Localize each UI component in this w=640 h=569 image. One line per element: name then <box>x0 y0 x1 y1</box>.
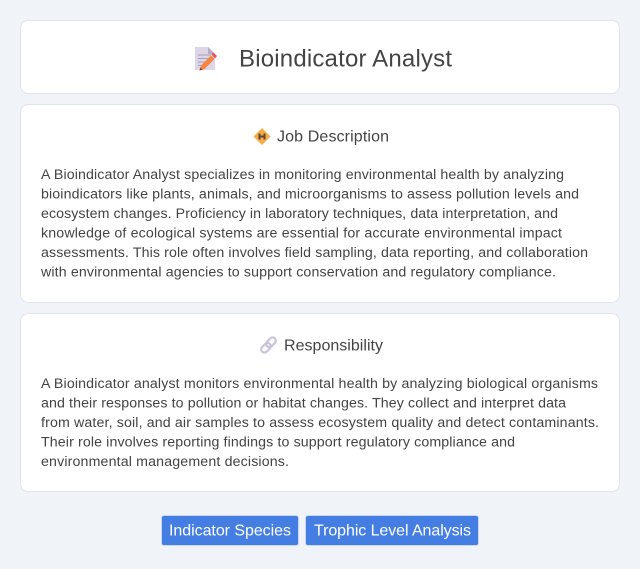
responsibility text: and their responses to pollution or habitat changes. They collect and interpret data <box>41 396 566 412</box>
tag: indicator species <box>162 516 298 546</box>
panel: responsibility <box>20 314 620 492</box>
tag: trophic level analysis <box>306 516 478 546</box>
panel: job description <box>20 104 620 302</box>
job description text <box>40 167 588 280</box>
job description text: assessments. This role often involves field sampling, data reporting, and collaboration <box>41 245 588 261</box>
responsibility text <box>41 376 599 470</box>
responsibility text: from water, soil, and air samples to assess ecosystem quality and detect contaminants. <box>41 415 599 431</box>
icon: chain link <box>260 336 277 354</box>
tag: trophic level analysis: Trophic Level Analysis <box>314 522 471 540</box>
heading: job description: Job Description <box>277 128 389 146</box>
job description text: bioindicators like plants, animals, and microorganisms to assess pollution levels and <box>41 186 579 202</box>
job description text: knowledge of ecological systems are essential for accurate environmental impact <box>41 226 562 242</box>
title panel <box>20 20 620 94</box>
job description text: with environmental agencies to support conservation and regulatory compliance. <box>40 264 556 280</box>
responsibility text: Their role involves reporting findings to support regulatory compliance and <box>41 434 515 450</box>
tag: indicator species: Indicator Species <box>169 522 291 540</box>
responsibility text: environmental management decisions. <box>41 454 289 470</box>
job description text: ecosystem changes. Proficiency in laboratory techniques, data interpretation, and <box>41 206 558 222</box>
icon: diamond sign <box>254 128 270 145</box>
title: Bioindicator Analyst <box>239 46 452 72</box>
heading: responsibility: Responsibility <box>284 338 383 354</box>
responsibility text: A Bioindicator analyst monitors environmental health by analyzing biological organisms <box>41 376 598 392</box>
job description text: A Bioindicator Analyst specializes in monitoring environmental health by analyzing <box>41 167 564 183</box>
icon: document with pencil <box>195 47 217 70</box>
